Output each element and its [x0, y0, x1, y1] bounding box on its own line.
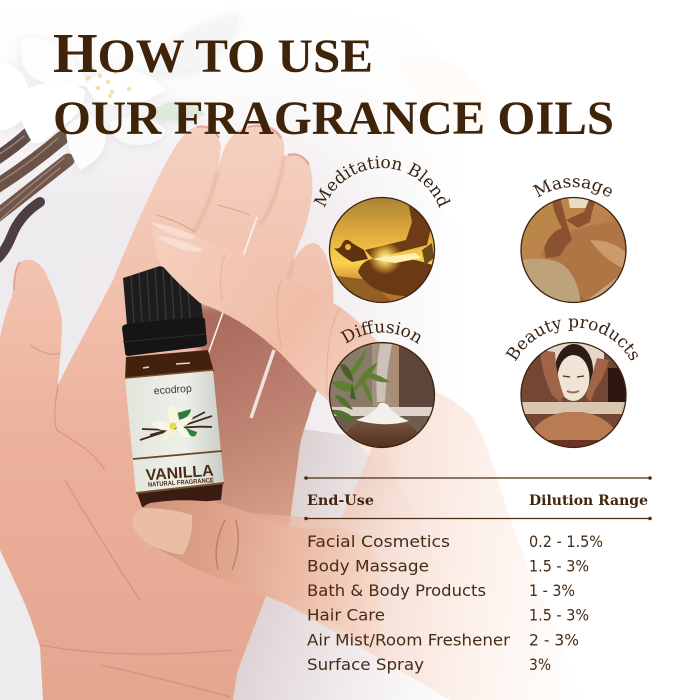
shaded palm behind bottle	[194, 304, 317, 516]
photo: beauty	[522, 343, 626, 447]
fingernails	[150, 222, 197, 239]
row: bath and body: 1 - 3%	[529, 581, 575, 600]
photo: diffusion	[329, 342, 436, 452]
use: beauty products	[505, 318, 638, 448]
finger	[152, 228, 437, 460]
table header rule top	[304, 476, 652, 480]
knuckle creases	[221, 255, 340, 396]
row: surface spray: Surface Spray	[307, 655, 424, 674]
use: diffusion	[328, 320, 436, 448]
cap collar	[122, 317, 207, 356]
thumb nail	[132, 508, 192, 555]
row: hair care: 1.5 - 3%	[529, 606, 589, 624]
brand text: ecodrop	[153, 383, 192, 397]
column heading: end-use: End-Use	[307, 493, 374, 509]
thumb	[133, 500, 380, 660]
curved label: Diffusion	[340, 320, 420, 344]
row: surface spray	[307, 655, 551, 674]
curved label: Massage	[532, 178, 612, 198]
palm creases	[30, 205, 250, 697]
photo: meditation	[329, 197, 440, 305]
thumb knuckle creases	[216, 520, 238, 570]
label	[125, 370, 224, 493]
fingertip nail rims	[14, 126, 309, 290]
row: bath and body	[307, 581, 575, 600]
ribbed cap	[123, 266, 203, 325]
product name: VANILLA	[145, 463, 215, 484]
use: meditation blend	[314, 156, 450, 304]
row: facial cosmetics: 0.2 - 1.5%	[529, 532, 603, 551]
title line 2: OUR FRAGRANCE OILS	[53, 92, 614, 145]
soft shadow below arm	[230, 420, 500, 700]
white flower	[0, 15, 240, 170]
row: hair care	[307, 606, 589, 624]
row: body massage: 1.5 - 3%	[529, 556, 589, 576]
gaps between fingers	[207, 217, 257, 357]
row: bath and body: Bath & Body Products	[307, 581, 486, 600]
curved label: Meditation Blend	[314, 156, 450, 208]
row: body massage	[307, 556, 589, 576]
row: facial cosmetics: Facial Cosmetics	[307, 532, 450, 551]
row: air mist: Air Mist/Room Freshener	[307, 630, 510, 650]
dilution table	[304, 476, 652, 674]
column heading: dilution range: Dilution Range	[529, 493, 648, 509]
photo ring	[521, 342, 626, 448]
use: massage	[520, 178, 627, 304]
photo: massage	[521, 197, 630, 305]
essential oil bottle	[122, 266, 224, 507]
table header rule bottom	[304, 517, 652, 520]
palm and fingers	[0, 125, 333, 700]
row: hair care: Hair Care	[307, 606, 385, 624]
title line 1: HOW TO USE	[53, 23, 373, 85]
title	[53, 23, 614, 145]
forearm faded	[250, 393, 583, 700]
vanilla illustration	[140, 405, 212, 442]
product subtitle: NATURAL FRAGRANCE	[148, 477, 215, 489]
overlapping index finger	[150, 222, 437, 460]
curved label: Beauty products	[505, 318, 638, 362]
row: surface spray: 3%	[529, 655, 551, 674]
vanilla beans	[0, 134, 68, 258]
bottle base	[136, 482, 223, 507]
hand	[0, 125, 345, 700]
photo ring	[330, 342, 434, 448]
row: air mist: 2 - 3%	[529, 630, 579, 650]
row: body massage: Body Massage	[307, 556, 429, 576]
amber shoulder	[125, 350, 214, 380]
photo ring	[521, 198, 626, 302]
finger shadows	[194, 156, 294, 280]
row: facial cosmetics	[307, 532, 603, 551]
photo ring	[330, 198, 434, 302]
thumb and faded forearm	[132, 393, 583, 700]
